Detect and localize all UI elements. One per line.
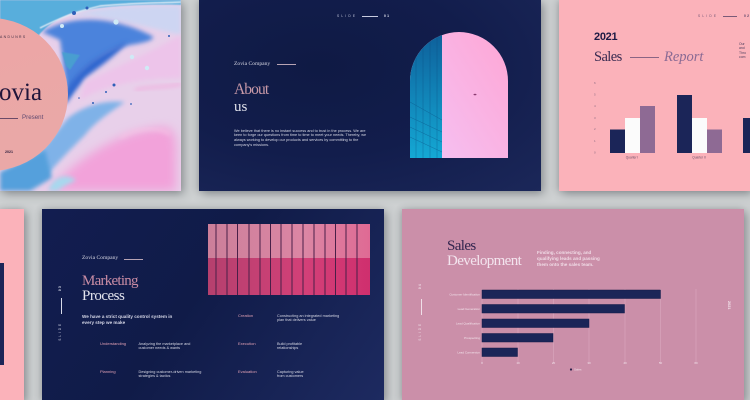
body paragraph: We believe that there is no instant success and to trust in the process. We are bbox=[234, 128, 365, 132]
bar chart: 3 bbox=[594, 116, 596, 120]
bar chart: 1 bbox=[594, 139, 596, 143]
horizontal bar chart: 40 bbox=[623, 361, 627, 365]
cover title: ovia bbox=[0, 79, 42, 106]
slide number header: SLIDE bbox=[337, 14, 357, 18]
vertical slide label: SLIDE bbox=[58, 322, 62, 341]
horizontal bar chart: 20 bbox=[552, 361, 555, 365]
bar chart: Quarter I bbox=[626, 156, 638, 160]
slide number header: 02 bbox=[744, 14, 750, 18]
heading: About: About bbox=[234, 80, 268, 98]
pink oval badge bbox=[0, 18, 68, 171]
description: qualifying leads and passing bbox=[537, 256, 600, 261]
horizontal bar chart: 50 bbox=[659, 361, 662, 365]
process steps left column bbox=[100, 341, 202, 378]
process steps right column: from customers bbox=[277, 374, 303, 378]
process steps left column: strategies & tactics bbox=[138, 374, 170, 378]
bar chart: 6 bbox=[594, 81, 596, 85]
horizontal bar chart: Customer Identification bbox=[449, 292, 480, 296]
horizontal bar chart: Prospecting bbox=[464, 336, 480, 340]
vertical slide label: 04 bbox=[418, 283, 422, 289]
heading: Marketing: Marketing bbox=[82, 272, 138, 288]
side note: com bbox=[739, 55, 745, 59]
arch image bbox=[410, 32, 508, 158]
description: Finding, connecting, and bbox=[537, 250, 591, 255]
bar chart: 5 bbox=[594, 93, 596, 97]
vertical slide label bbox=[58, 285, 62, 341]
side label: 2021 bbox=[727, 301, 731, 309]
vertical slide label bbox=[418, 283, 422, 341]
process steps right column: Evaluation bbox=[238, 369, 257, 374]
process steps right column: Creation bbox=[238, 313, 253, 318]
horizontal bar chart: 60 bbox=[694, 361, 698, 365]
title rule bbox=[630, 57, 659, 58]
process steps right column: Execution bbox=[238, 341, 256, 346]
horizontal bar chart: Lead Qualification bbox=[456, 322, 480, 326]
panel: cropped pink slide bbox=[0, 209, 24, 400]
heading: Sales: Sales bbox=[447, 238, 476, 254]
horizontal bar chart: Lead Generation bbox=[458, 307, 480, 311]
subtitle: Present bbox=[22, 114, 43, 121]
label: top small text: ANDUNRS bbox=[0, 34, 27, 38]
company label: Zovia Company bbox=[234, 60, 270, 66]
process steps right column: Constructing an integrated marketing bbox=[277, 314, 339, 318]
intro statement bbox=[82, 314, 172, 325]
description bbox=[537, 250, 600, 267]
side note: Our bbox=[739, 42, 745, 46]
process steps right column: plan that delivers value bbox=[277, 318, 316, 322]
heading: Development: Development bbox=[447, 252, 521, 268]
process steps right column: Build profitable bbox=[277, 342, 302, 346]
panel: marketing process slide bbox=[42, 209, 384, 400]
bar chart: 0 bbox=[594, 151, 596, 155]
vertical slide label: 03 bbox=[58, 285, 62, 291]
slide number header bbox=[337, 14, 390, 18]
description: them onto the sales team. bbox=[537, 262, 593, 267]
title: Sales: Sales bbox=[594, 48, 622, 64]
horizontal bar chart: 10 bbox=[516, 361, 520, 365]
side note: and bbox=[739, 46, 745, 50]
panel: sales report slide bbox=[559, 0, 750, 191]
year heading: 2021 bbox=[594, 31, 617, 43]
process steps left column: Analyzing the marketplace and bbox=[138, 342, 190, 346]
title: Report: Report bbox=[664, 48, 703, 64]
side note: Thro bbox=[739, 51, 746, 55]
slide number header bbox=[698, 14, 750, 18]
body paragraph: keen to forge our questions from time to time to meet your needs. Thereby, we bbox=[234, 133, 366, 137]
intro statement: We have a strict quality control system in bbox=[82, 314, 172, 319]
intro statement: every step we make bbox=[82, 320, 125, 325]
horizontal bar chart: 30 bbox=[587, 361, 591, 365]
process steps right column: relationships bbox=[277, 346, 298, 350]
process steps right column: Capturing value bbox=[277, 370, 304, 374]
divider rule bbox=[0, 118, 18, 119]
vertical slide label: SLIDE bbox=[418, 322, 422, 341]
company label: Zovia Company bbox=[82, 255, 118, 261]
horizontal bar chart: Lead Conversion bbox=[457, 350, 480, 354]
horizontal bar chart bbox=[449, 289, 698, 372]
navy bar fragment bbox=[0, 263, 4, 365]
bar chart bbox=[594, 81, 750, 160]
heading: us: us bbox=[234, 99, 247, 115]
process steps left column: Designing customer-driven marketing bbox=[138, 370, 201, 374]
side note bbox=[739, 42, 746, 59]
horizontal bar chart: 0 bbox=[481, 361, 483, 365]
horizontal bar chart: Sales bbox=[574, 368, 582, 372]
process steps left column: Planning bbox=[100, 369, 116, 374]
panel: about us slide bbox=[199, 0, 541, 191]
year: 2021 bbox=[5, 150, 13, 154]
marble artwork bbox=[0, 0, 181, 191]
bar chart: 4 bbox=[594, 104, 596, 108]
body paragraph: always working to develop our products and services by committing to the bbox=[234, 138, 358, 142]
panel: marble cover slide bbox=[0, 0, 181, 191]
process steps left column: Understanding bbox=[100, 341, 126, 346]
bar chart: 2 bbox=[594, 127, 596, 131]
process steps right column bbox=[238, 313, 339, 378]
bar chart: Quarter II bbox=[692, 156, 706, 160]
process steps left column: customer needs & wants bbox=[138, 346, 180, 350]
slide number header: SLIDE bbox=[698, 14, 718, 18]
panel: sales development slide bbox=[402, 209, 744, 400]
striped gradient image bbox=[208, 224, 370, 295]
heading: Process: Process bbox=[82, 288, 124, 304]
body paragraph bbox=[234, 128, 366, 147]
body paragraph: company's missions. bbox=[234, 143, 269, 147]
slide number header: 01 bbox=[384, 14, 390, 18]
